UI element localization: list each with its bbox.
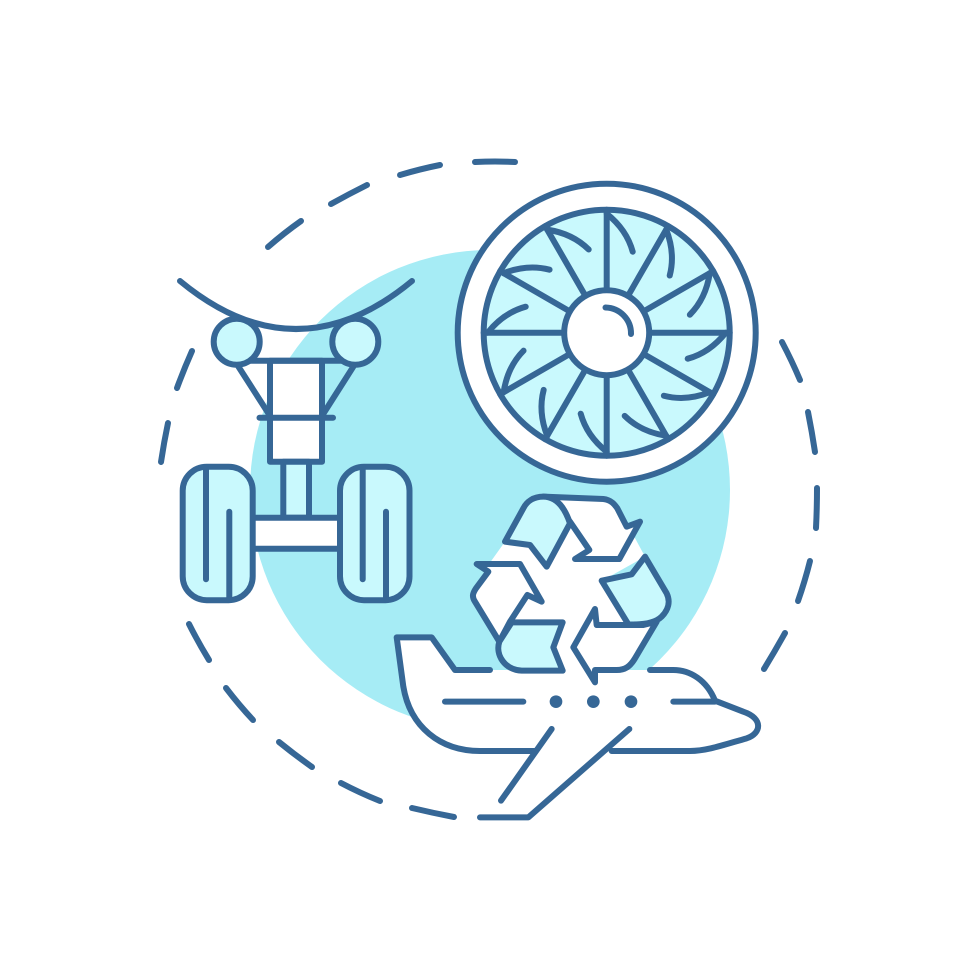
fan blades bbox=[484, 210, 730, 456]
hub highlight bbox=[606, 308, 631, 334]
plane body fill bbox=[397, 637, 758, 751]
right tire grooves bbox=[363, 467, 386, 600]
mount circles bbox=[214, 319, 260, 365]
icon: turbine fan bbox=[458, 184, 756, 482]
recycle arrow: right bbox=[573, 557, 669, 682]
dashed outer ring bbox=[161, 162, 817, 817]
fan outer casing bbox=[458, 184, 756, 482]
strut housing bbox=[270, 361, 322, 462]
plane wings bbox=[480, 729, 629, 817]
icon: landing gear bbox=[180, 281, 412, 600]
recycle arrow: left bbox=[473, 564, 563, 671]
white backing behind recycling symbol bbox=[488, 499, 657, 682]
background blue circle bbox=[250, 250, 730, 730]
window dots bbox=[550, 695, 637, 708]
recycle arrow: top bbox=[505, 497, 640, 567]
fan hub bbox=[564, 290, 649, 375]
plane outline bbox=[397, 637, 758, 751]
left tire grooves bbox=[206, 467, 229, 600]
fuselage arc bbox=[180, 281, 412, 329]
piston bbox=[283, 462, 309, 518]
icon: recycling symbol bbox=[473, 497, 669, 682]
right tire bbox=[340, 467, 410, 600]
plane windows bbox=[445, 693, 715, 711]
axle bbox=[250, 518, 342, 549]
icon: airplane bbox=[397, 637, 758, 817]
cross bar and braces bbox=[238, 361, 353, 418]
left tire bbox=[183, 467, 253, 600]
fan blade disc bbox=[484, 210, 730, 456]
